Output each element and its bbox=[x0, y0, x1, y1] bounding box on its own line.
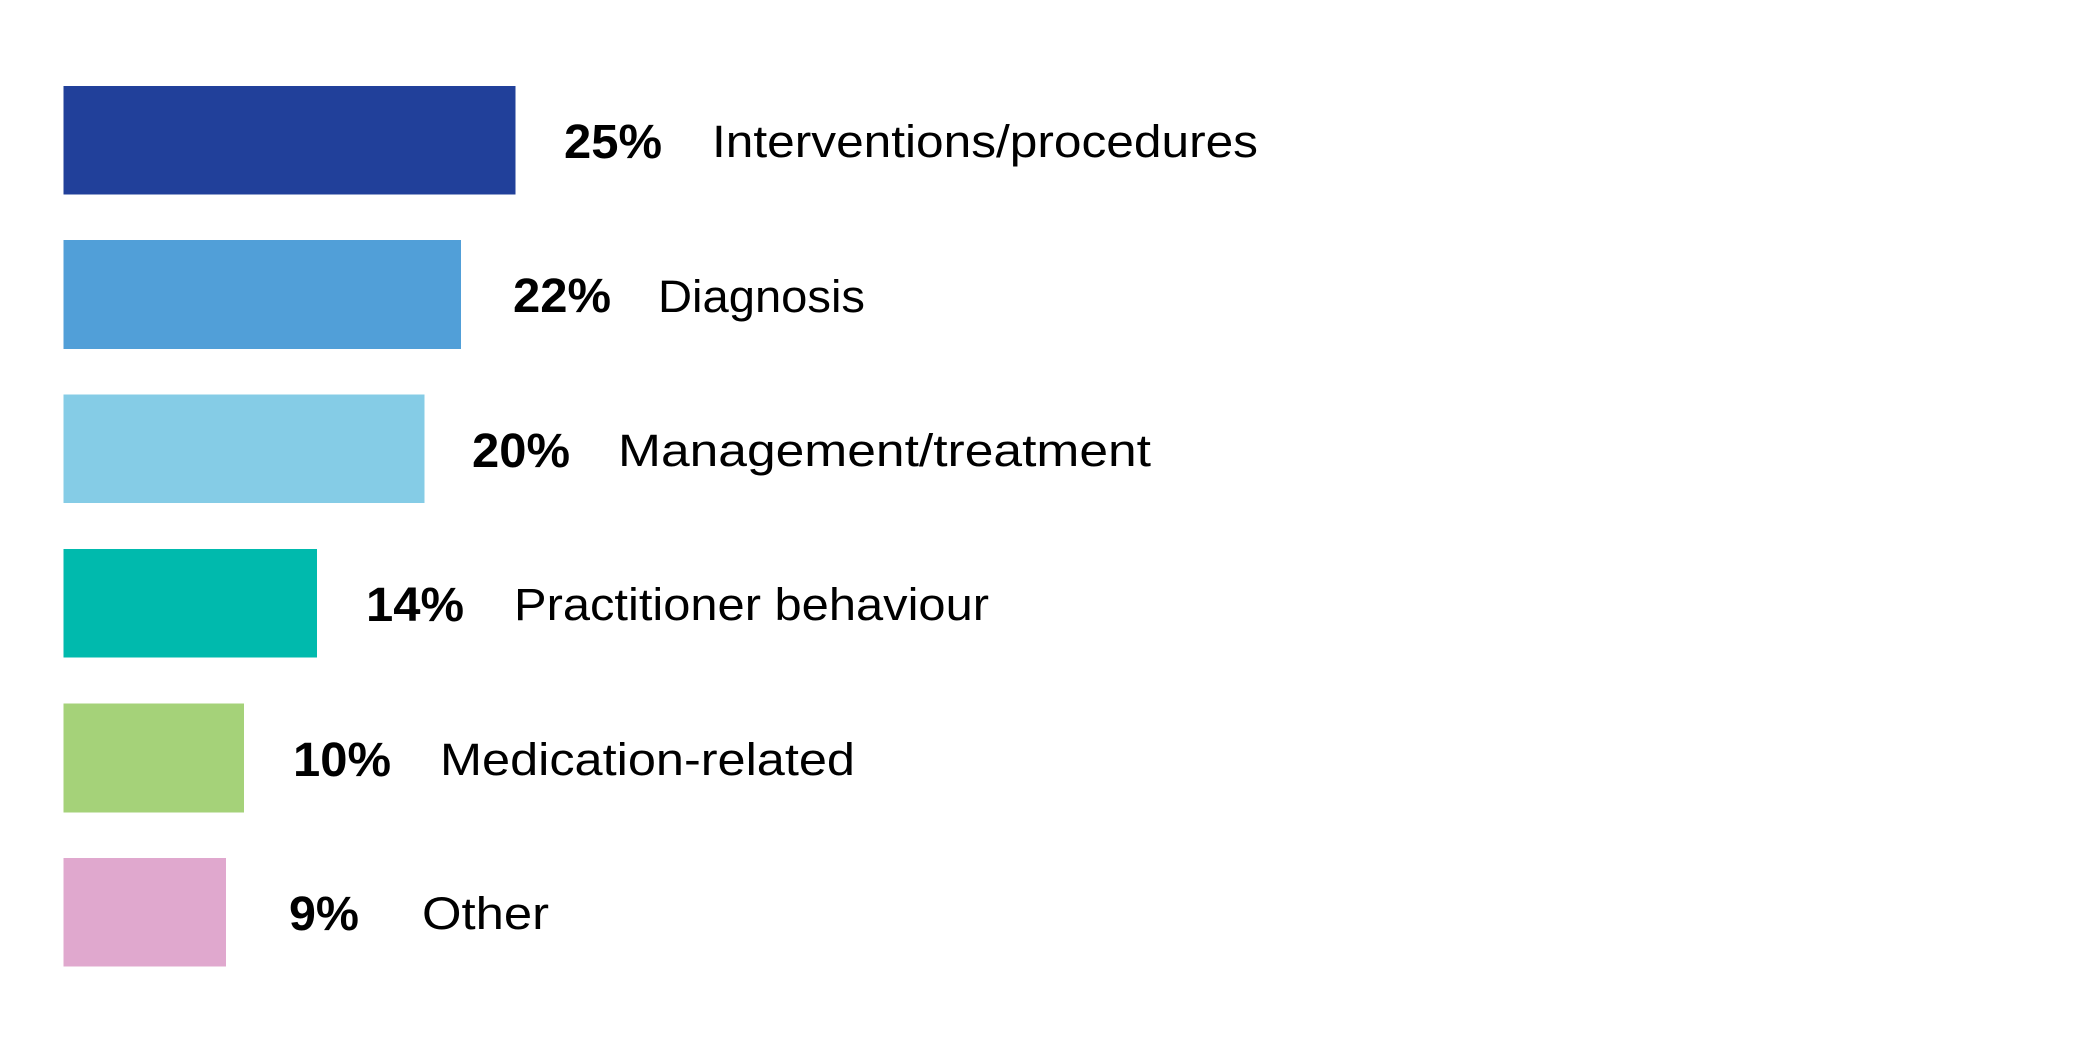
row: management/treatment bbox=[64, 394, 1152, 503]
bar: 20% bbox=[64, 394, 424, 503]
row: practitioner behaviour bbox=[64, 549, 989, 658]
row: interventions/procedures bbox=[64, 86, 1258, 194]
row: diagnosis bbox=[64, 240, 865, 349]
row: other bbox=[64, 858, 549, 966]
bar: 14% bbox=[64, 549, 317, 658]
value: 10%: 10% bbox=[293, 734, 391, 787]
value: 22%: 22% bbox=[513, 270, 611, 323]
label: diagnosis: Diagnosis bbox=[658, 271, 865, 322]
label: medication-related: Medication-related bbox=[440, 734, 855, 785]
bar: 22% bbox=[64, 240, 461, 349]
label: interventions/procedures: Interventions/procedures bbox=[712, 116, 1258, 167]
value: 9%: 9% bbox=[289, 888, 359, 941]
value: 25%: 25% bbox=[564, 116, 662, 169]
row: medication-related bbox=[64, 704, 855, 812]
value: 20%: 20% bbox=[472, 425, 570, 478]
label: other: Other bbox=[422, 888, 549, 939]
label: management/treatment: Management/treatment bbox=[618, 425, 1152, 476]
bar: 9% bbox=[64, 858, 226, 966]
bar: 25% bbox=[64, 86, 516, 194]
value: 14%: 14% bbox=[366, 579, 464, 632]
bar: 10% bbox=[64, 704, 244, 812]
label: practitioner behaviour: Practitioner behaviour bbox=[514, 579, 989, 630]
